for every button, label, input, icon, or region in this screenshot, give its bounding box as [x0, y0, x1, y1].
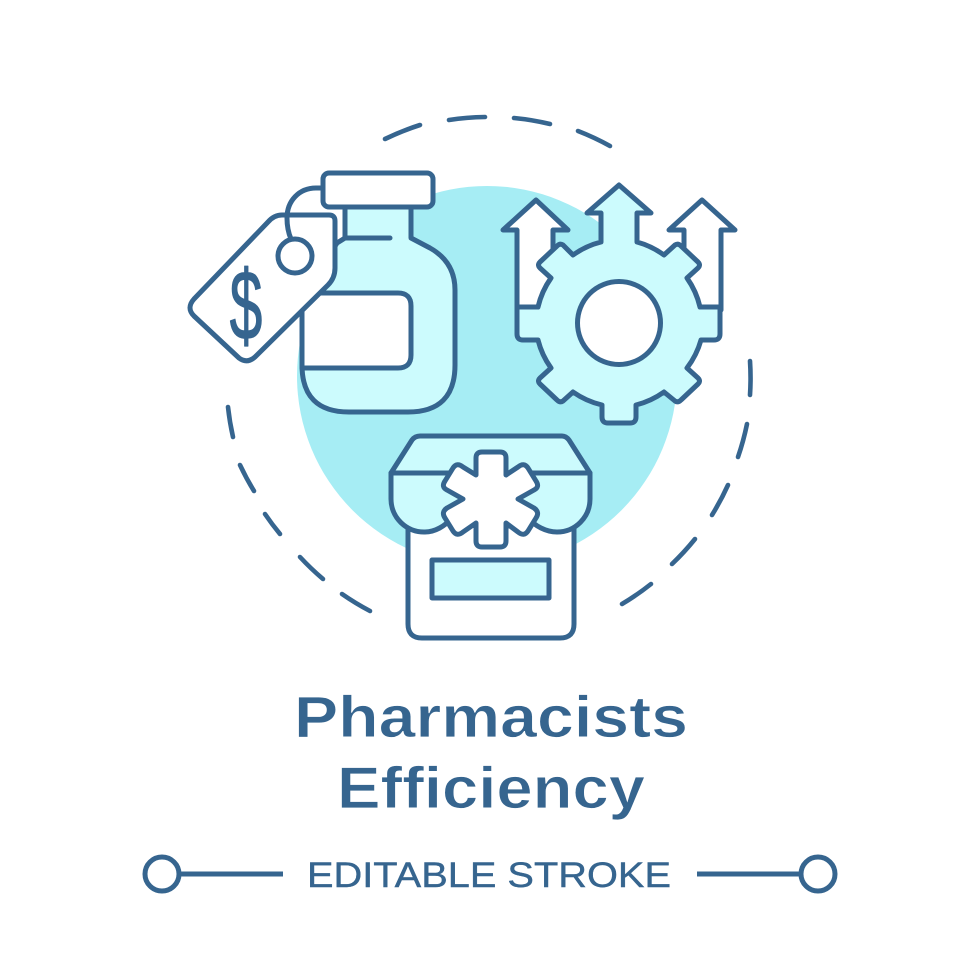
price tag	[190, 215, 335, 361]
dollar sign: $	[230, 252, 262, 361]
bottle label	[302, 293, 411, 368]
footer label: EDITABLE STROKE	[307, 856, 671, 895]
bottle body	[302, 207, 455, 412]
bottle shoulder line	[345, 236, 390, 240]
gear hub	[578, 282, 660, 364]
left connector	[145, 857, 283, 891]
tag hole	[278, 239, 312, 273]
right connector	[697, 857, 835, 891]
title line 1: Pharmacists	[294, 685, 688, 750]
right arrow	[669, 200, 735, 310]
store body	[408, 520, 574, 638]
title	[294, 685, 688, 821]
gear with centre arrow	[517, 185, 720, 423]
left arrow	[503, 200, 568, 310]
bottle cap	[323, 173, 433, 207]
tag string	[287, 188, 322, 239]
store sign	[432, 560, 549, 598]
medical star	[443, 452, 538, 547]
background circle	[297, 186, 677, 566]
footer: editable stroke	[145, 856, 835, 895]
icon: pharmacy store	[391, 436, 590, 638]
icon: medicine bottle with price tag	[190, 173, 455, 412]
icon: gear with growth arrows	[503, 185, 735, 423]
dashed ring	[228, 117, 751, 611]
title line 2: Efficiency	[337, 756, 645, 821]
awning	[391, 436, 590, 532]
awning line	[391, 470, 590, 476]
